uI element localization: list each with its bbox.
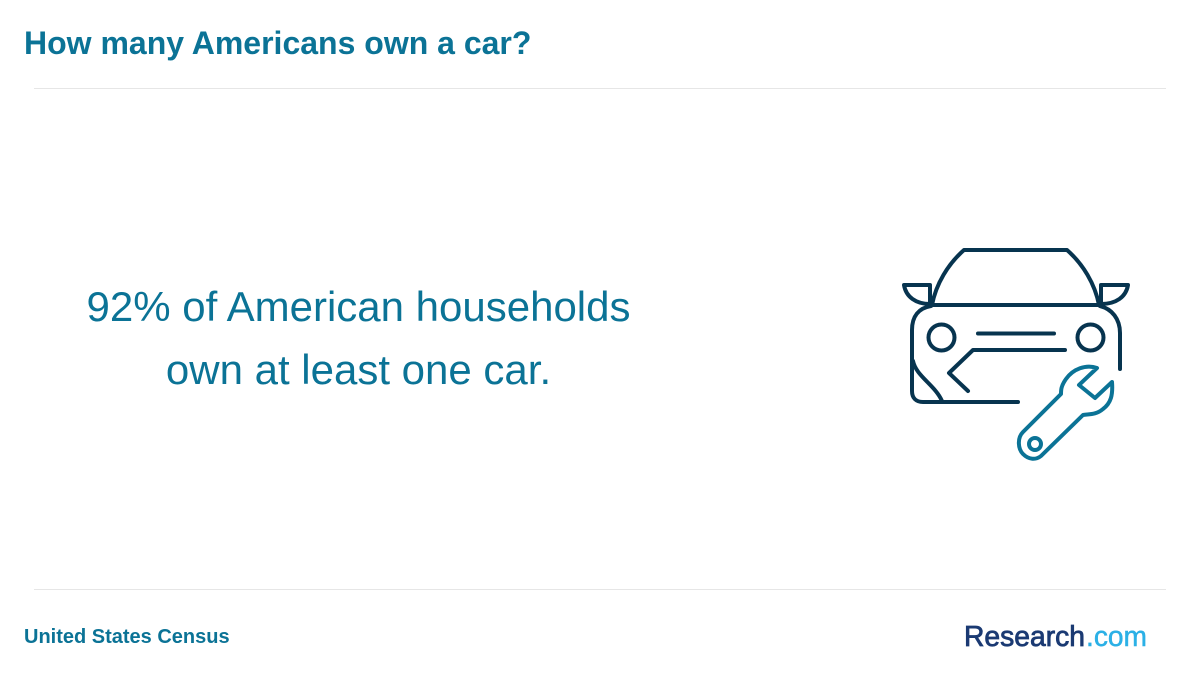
wrench hole (1029, 438, 1041, 450)
title: How many Americans own a car? (24, 25, 531, 61)
main statement: 92% of American households (86, 283, 630, 330)
wrench (1019, 367, 1112, 459)
logo: Research.com: Research (964, 621, 1085, 653)
logo: Research.com: .com (1086, 621, 1147, 653)
main statement: own at least one car. (166, 346, 551, 393)
main statement (86, 283, 630, 393)
car outline (904, 250, 1128, 402)
icon: car with wrench (902, 248, 1130, 461)
logo: Research.com (964, 621, 1147, 653)
source: United States Census (24, 626, 230, 648)
